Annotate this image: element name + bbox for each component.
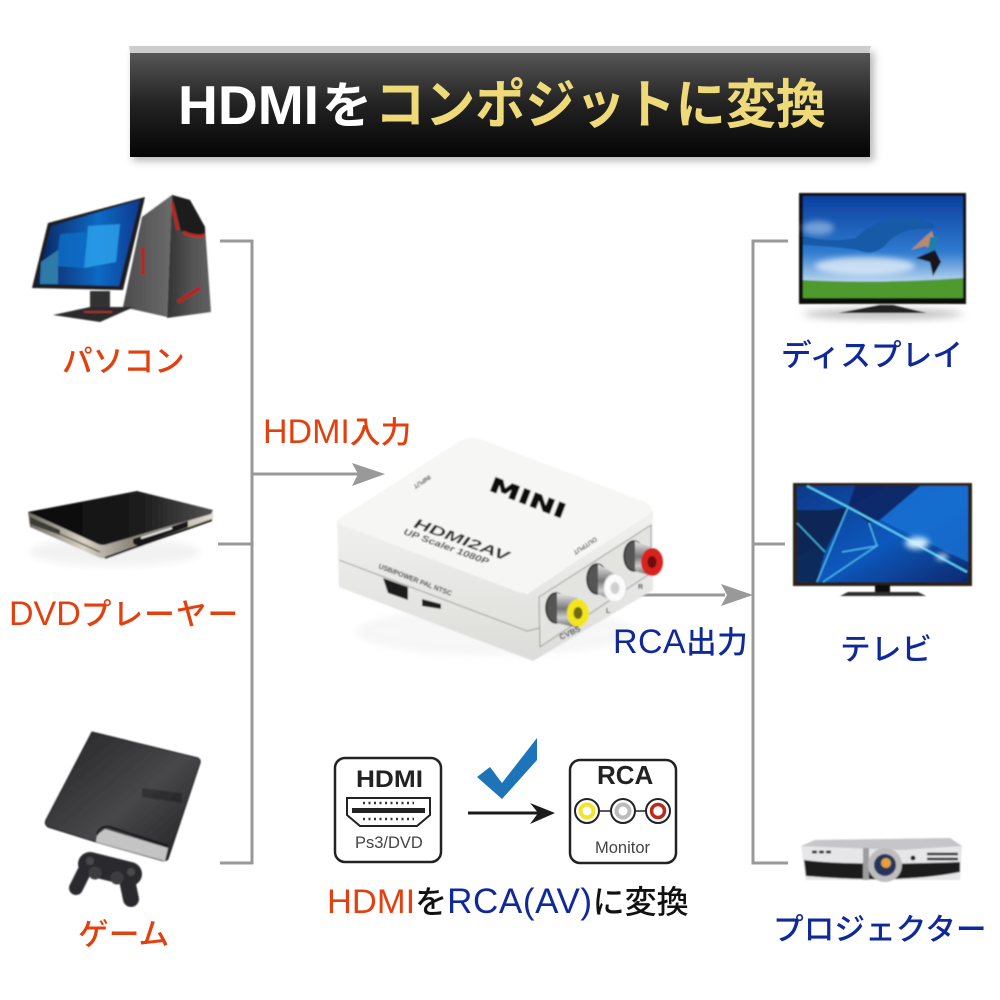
icon: RCA: [570, 760, 676, 863]
icon: DVD player: [28, 491, 213, 566]
output connector lines: [635, 241, 788, 863]
converter device: USB/POWER PAL NTSC: [377, 563, 453, 598]
icon: projector: [801, 838, 962, 882]
icon: display: [799, 193, 966, 319]
converter device: [337, 438, 663, 661]
title banner: を: [322, 78, 372, 134]
icon: RCA: Monitor: [595, 839, 651, 857]
converter device: UP Scaler 1080P: [402, 526, 492, 567]
icon: RCA: RCA: [597, 760, 654, 790]
converter device: INPUT: [412, 473, 432, 490]
label: projector: プロジェクター: [773, 912, 987, 947]
caption: HDMIをRCA(AV)に変換: [327, 882, 689, 921]
label: display: ディスプレイ: [781, 338, 963, 373]
title banner: HDMI: [178, 74, 319, 136]
title banner: [129, 46, 874, 161]
icon: HDMI: HDMI: [356, 766, 423, 793]
converter device: L: [606, 608, 611, 615]
label: DVD player: DVDプレーヤー: [9, 595, 239, 633]
arrow: HDMI to RCA: [468, 803, 555, 824]
converter device: OUTPUT: [572, 535, 598, 555]
label: HDMI input: HDMI入力: [263, 413, 411, 451]
icon: HDMI: [335, 758, 441, 862]
label: TV: テレビ: [840, 632, 932, 667]
icon: television: [793, 483, 972, 596]
converter device: HDMI2AV: [412, 515, 514, 565]
input connector lines: [218, 241, 385, 863]
icon: HDMI: Ps3/DVD: [355, 834, 423, 852]
label: RCA output: RCA出力: [613, 623, 748, 661]
converter device: R: [638, 584, 643, 591]
label: PC: パソコン: [62, 344, 185, 379]
label: game: ゲーム: [78, 917, 169, 952]
title banner: コンポジットに変換: [375, 76, 826, 135]
converter device: MINI: [486, 472, 569, 523]
converter device: CVBS: [558, 624, 583, 642]
RCA jack: white: [587, 564, 626, 602]
RCA jack: red: [624, 541, 663, 576]
RCA jack: yellow: [546, 593, 589, 628]
icon: PS3 console and controller: [45, 732, 200, 899]
icon: blue check mark: [477, 738, 537, 799]
icon: desktop PC: [32, 195, 211, 322]
